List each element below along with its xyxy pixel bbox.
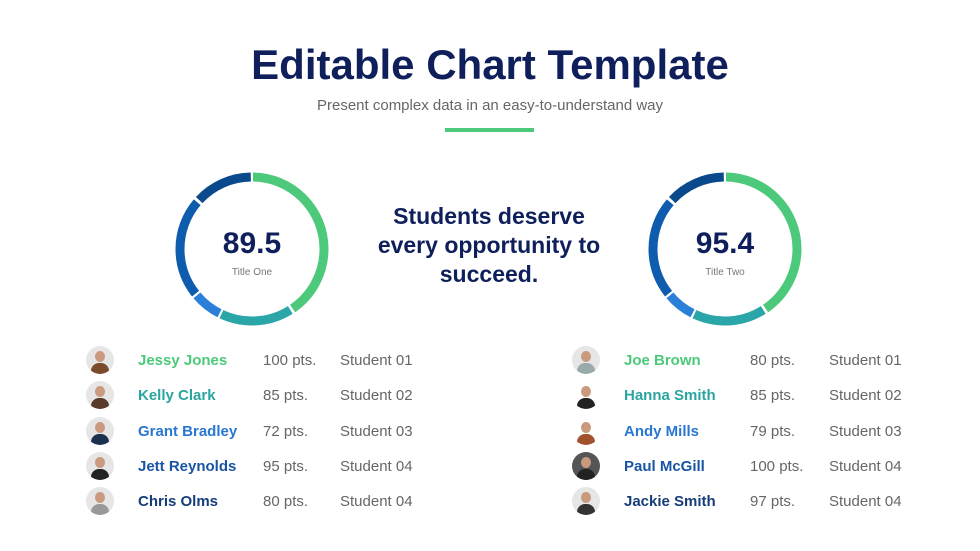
donut chart: right [648,172,802,326]
list: left students [86,346,413,515]
row: Paul McGill [572,452,902,480]
donut chart: left [176,172,328,326]
row: Hanna Smith: Student 02 [829,387,902,404]
row: Jessy Jones: 100 pts. [263,352,316,369]
row: Paul McGill: 100 pts. [750,458,803,475]
row: Jackie Smith: 97 pts. [750,493,795,510]
row: Chris Olms: 80 pts. [263,493,308,510]
row: Jessy Jones: Student 01 [340,352,413,369]
green underline [445,128,534,132]
donut chart: right: Title Two [705,267,745,278]
row: Hanna Smith: Hanna Smith [624,387,716,404]
list: right students [572,346,902,515]
row: Jackie Smith: Jackie Smith [624,493,716,510]
row: Jackie Smith: Student 04 [829,493,902,510]
row: Chris Olms [86,487,413,515]
row: Kelly Clark: Kelly Clark [138,387,216,404]
row: Chris Olms: Chris Olms [138,493,218,510]
row: Grant Bradley: Grant Bradley [138,423,237,440]
row: Kelly Clark: Student 02 [340,387,413,404]
row: Hanna Smith [577,386,902,409]
row: Jett Reynolds: Student 04 [340,458,413,475]
title: Editable Chart Template [251,41,729,88]
row: Andy Mills: Andy Mills [624,423,699,440]
row: Kelly Clark: 85 pts. [263,387,308,404]
row: Grant Bradley [86,417,413,445]
row: Paul McGill: Student 04 [829,458,902,475]
row: Paul McGill: Paul McGill [624,458,705,475]
row: Hanna Smith: 85 pts. [750,387,795,404]
row: Andy Mills: 79 pts. [750,423,795,440]
row: Jett Reynolds: 95 pts. [263,458,308,475]
donut chart: left: Title One [232,267,273,278]
donut chart: left: 89.5 [223,227,281,260]
center quote: Students deserve every opportunity to succeed. [378,203,600,287]
row: Andy Mills: Student 03 [829,423,902,440]
row: Joe Brown: Joe Brown [624,352,701,369]
row: Jessy Jones [86,346,413,374]
donut chart: right: 95.4 [696,227,755,260]
row: Jett Reynolds: Jett Reynolds [138,458,236,475]
row: Jackie Smith [572,487,902,515]
subtitle: Present complex data in an easy-to-understand way [317,97,663,114]
row: Andy Mills [577,422,902,445]
row: Jett Reynolds [86,452,413,480]
row: Chris Olms: Student 04 [340,493,413,510]
row: Joe Brown [572,346,902,374]
row: Joe Brown: Student 01 [829,352,902,369]
row: Grant Bradley: 72 pts. [263,423,308,440]
row: Kelly Clark [86,381,413,409]
row: Jessy Jones: Jessy Jones [138,352,227,369]
row: Joe Brown: 80 pts. [750,352,795,369]
row: Grant Bradley: Student 03 [340,423,413,440]
